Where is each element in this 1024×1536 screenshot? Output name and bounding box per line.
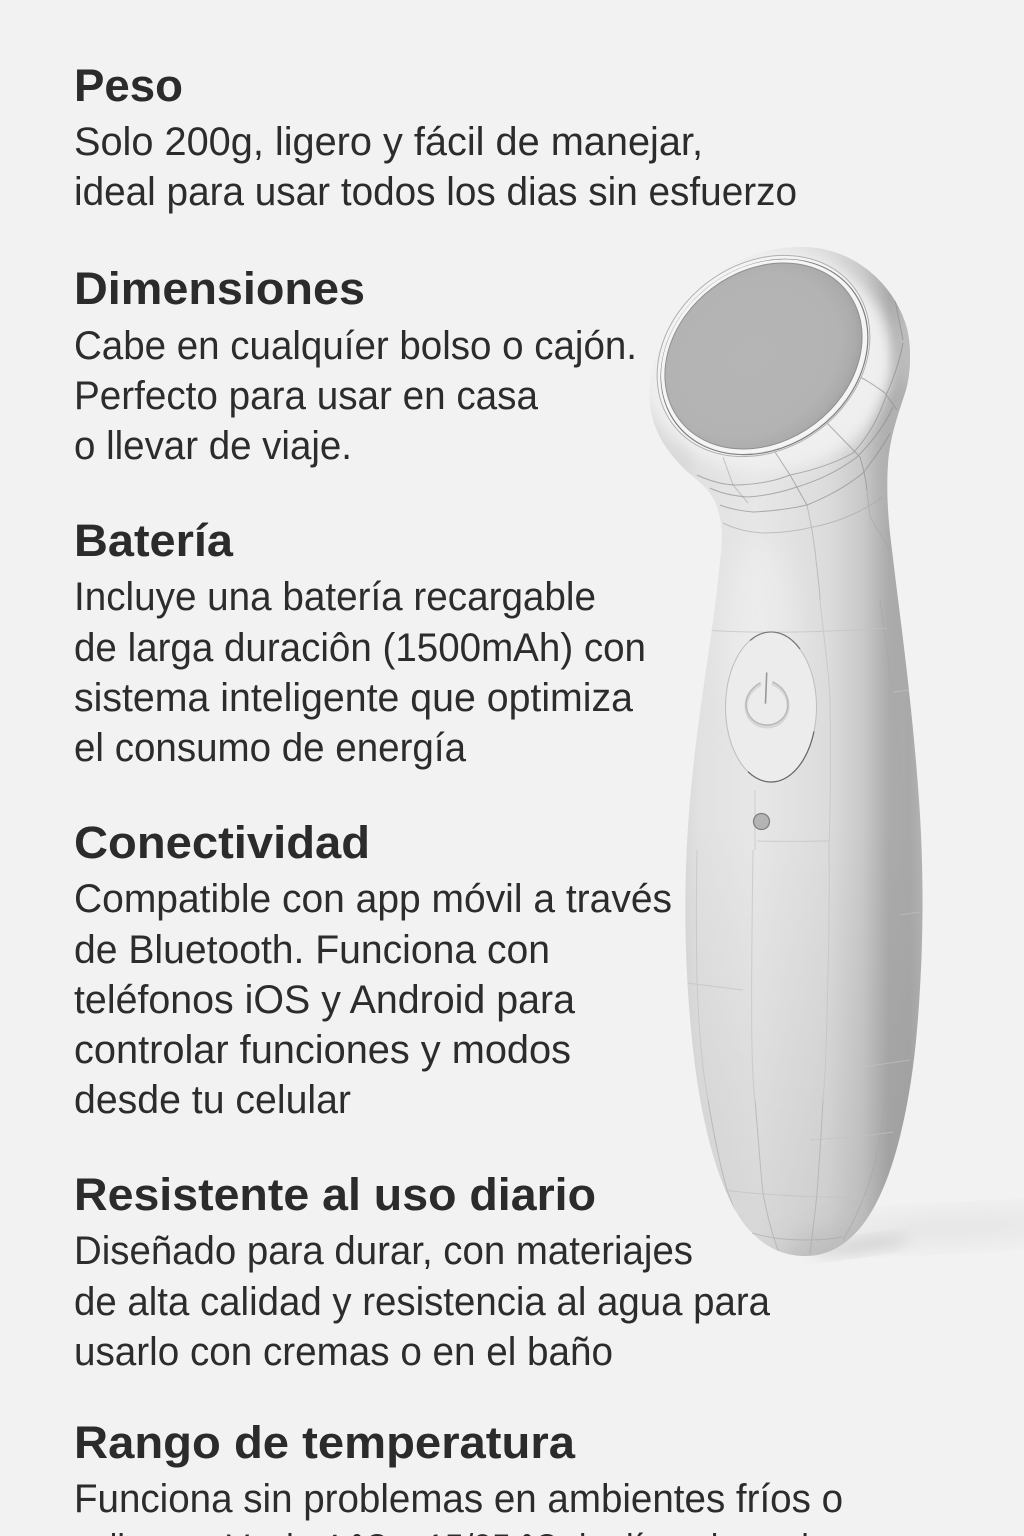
power button <box>726 632 816 782</box>
section: Dimensiones <box>74 263 637 468</box>
heading: Conectividad: Conectividad <box>74 817 370 868</box>
text: Batería description: de larga duraciôn (1500mAh) con <box>74 626 646 670</box>
text: Resistente description: Diseñado para durar, con materiajes <box>74 1229 693 1273</box>
text: Peso description <box>74 120 797 214</box>
text: Resistente description <box>74 1229 771 1374</box>
text: Peso description: Solo 200g, ligero y fácil de manejar, <box>74 120 703 164</box>
text: Dimensiones description: o llevar de viaje. <box>74 424 352 468</box>
text: Dimensiones description <box>74 324 637 468</box>
section: Peso <box>74 60 797 214</box>
text: Dimensiones description: Perfecto para usar en casa <box>74 374 539 418</box>
text: Conectividad description <box>74 877 672 1122</box>
text: Resistente description: de alta calidad y resistencia al agua para <box>74 1280 771 1324</box>
heading: Rango de temperatura: Rango de temperatura <box>74 1417 576 1468</box>
heading: Dimensiones: Dimensiones <box>74 263 365 314</box>
indicator light <box>754 814 770 830</box>
text: Batería description: Incluye una batería recargable <box>74 575 596 619</box>
device body <box>650 247 923 1256</box>
text: Conectividad description: controlar funciones y modos <box>74 1028 571 1072</box>
section: Conectividad <box>74 817 672 1122</box>
text: Resistente description: usarlo con cremas o en el baño <box>74 1330 613 1374</box>
text: Conectividad description: Compatible con app móvil a través <box>74 877 672 921</box>
text: Rango description: Funciona sin problemas en ambientes fríos o <box>74 1477 843 1521</box>
text: Peso description: ideal para usar todos los dias sin esfuerzo <box>74 170 797 214</box>
section: Rango de temperatura <box>74 1417 843 1536</box>
text: Batería description <box>74 575 646 770</box>
heading: Peso: Peso <box>74 60 183 111</box>
head ring <box>617 214 910 498</box>
heading: Resistente al uso diario: Resistente al uso diario <box>74 1169 596 1220</box>
text: Conectividad description: teléfonos iOS y Android para <box>74 978 576 1022</box>
device shading and mesh lines <box>650 252 920 1256</box>
text: Batería description: sistema inteligente que optimiza <box>74 676 634 720</box>
icon: power symbol <box>746 673 788 727</box>
device illustration <box>650 247 922 1256</box>
floor shadow <box>810 1209 1024 1259</box>
section: Batería <box>74 515 646 770</box>
text: Conectividad description: desde tu celular <box>74 1078 351 1122</box>
grey treatment disc <box>628 225 899 487</box>
heading: Batería: Batería <box>74 515 234 566</box>
section: Resistente al uso diario <box>74 1169 771 1374</box>
text: Batería description: el consumo de energía <box>74 726 467 770</box>
text: Conectividad description: de Bluetooth. Funciona con <box>74 928 550 972</box>
text: Dimensiones description: Cabe en cualquíer bolso o cajón. <box>74 324 637 368</box>
